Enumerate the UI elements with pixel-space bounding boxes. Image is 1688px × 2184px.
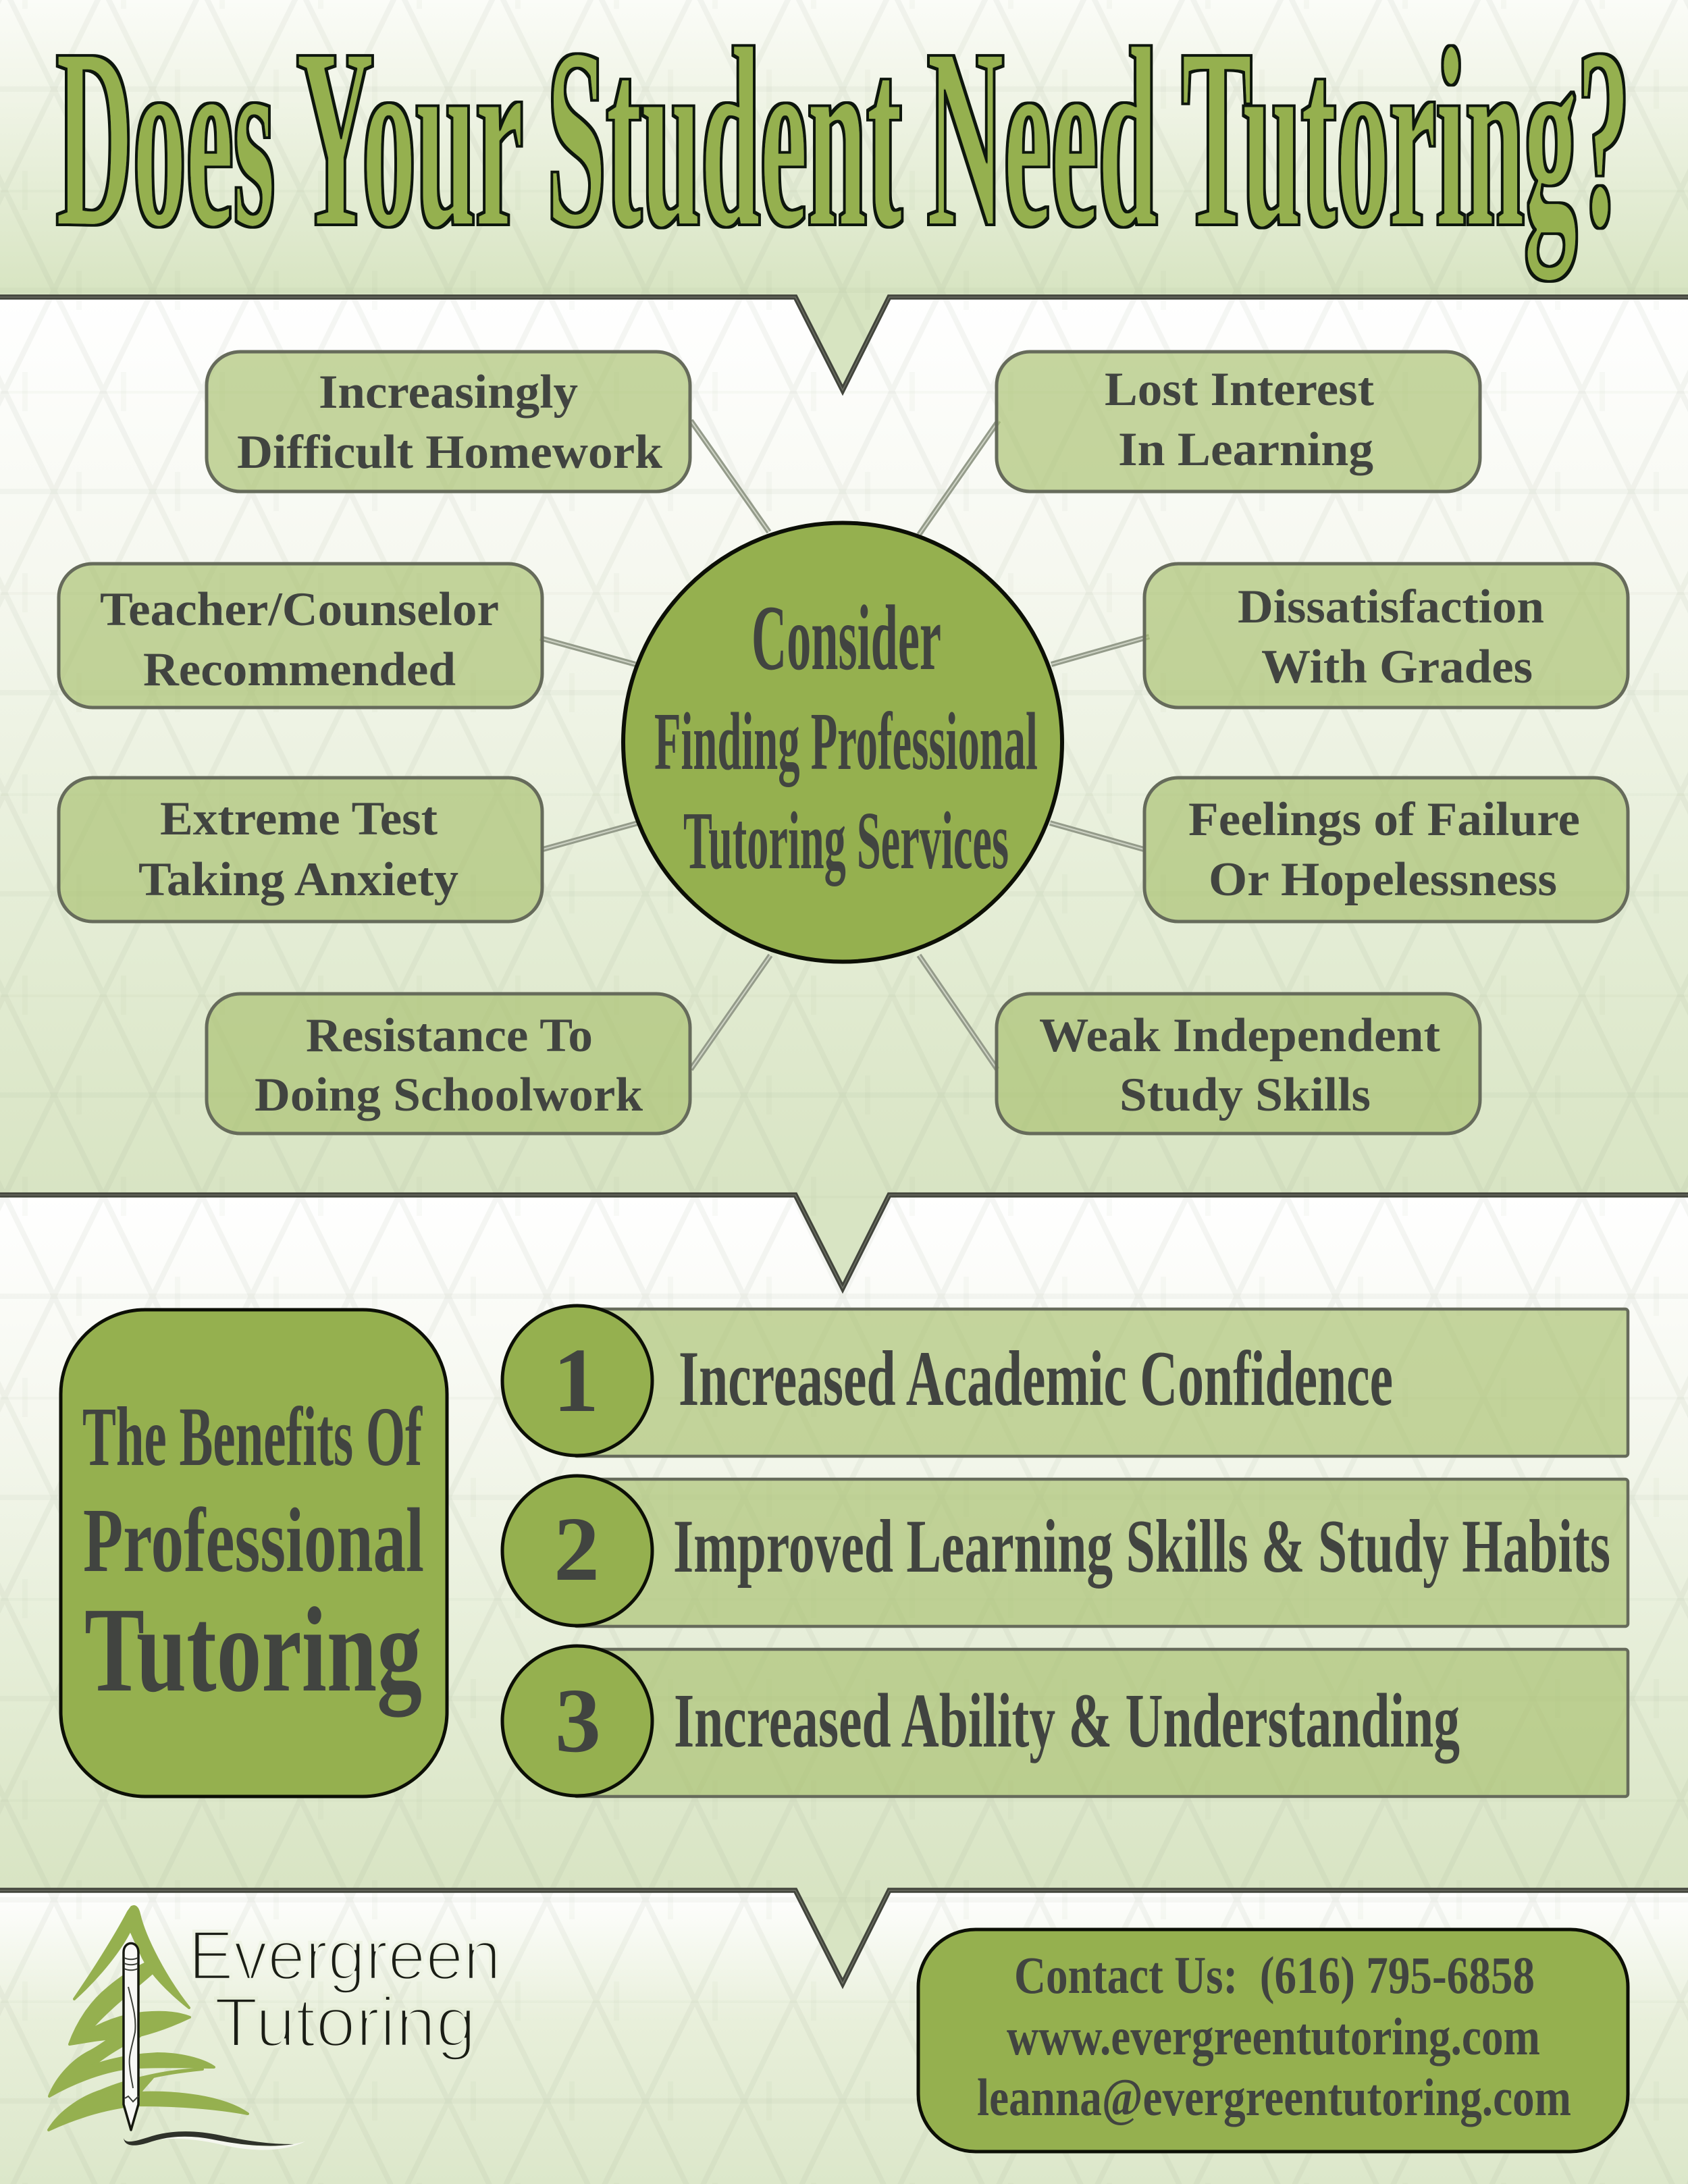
box: weak independent study skills: Study Skills	[1119, 1069, 1371, 1121]
box: increasingly difficult homework: Difficult Homework	[237, 426, 663, 479]
box: resistance to doing schoolwork	[207, 994, 690, 1134]
box: weak independent study skills: Weak Independent	[1039, 1009, 1440, 1062]
box: resistance to doing schoolwork: Doing Schoolwork	[255, 1069, 643, 1121]
benefit 1	[502, 1306, 1628, 1456]
panel: benefits heading	[61, 1310, 447, 1796]
panel: contact details: leanna@evergreentutoring.com	[977, 2068, 1571, 2127]
box: teacher/counselor recommended: Teacher/Counselor	[100, 583, 499, 636]
title: Your	[296, 0, 523, 280]
panel: contact details: Contact Us: (616) 795-6858	[1014, 1946, 1535, 2004]
icon: pencil	[124, 1943, 138, 2130]
box: increasingly difficult homework	[207, 352, 690, 491]
title: Does	[56, 0, 275, 280]
title	[56, 0, 1630, 284]
center circle: consider tutoring: Consider	[751, 586, 941, 689]
benefit 1: 1	[553, 1330, 599, 1431]
panel: contact details: www.evergreentutoring.com	[1007, 2007, 1540, 2066]
center circle: consider tutoring	[623, 523, 1062, 961]
box: lost interest in learning: Lost Interest	[1105, 363, 1374, 416]
box: teacher/counselor recommended	[59, 564, 542, 708]
center circle: consider tutoring: Tutoring Services	[683, 795, 1009, 886]
icon: ground swoosh	[124, 2131, 305, 2150]
box: feelings of failure or hopelessness	[1144, 778, 1628, 922]
logo wordmark: evergreen: Evergreen	[188, 1917, 501, 1995]
box: dissatisfaction with grades	[1144, 564, 1628, 708]
panel: benefits heading: Professional	[83, 1490, 424, 1591]
divider arrow: bottom	[0, 1890, 1688, 1983]
title: Student	[547, 0, 903, 280]
box: lost interest in learning	[997, 352, 1480, 491]
panel: warning sign boxes	[59, 352, 1628, 1134]
panel: benefits heading: Tutoring	[84, 1582, 422, 1717]
connector lines	[540, 421, 1149, 1069]
benefit 3: 3	[555, 1670, 601, 1772]
box: extreme test taking anxiety: Extreme Test	[160, 793, 438, 845]
box: extreme test taking anxiety: Taking Anxiety	[138, 853, 458, 906]
divider arrow: middle	[0, 1195, 1688, 1288]
box: teacher/counselor recommended: Recommended	[143, 643, 456, 696]
box: dissatisfaction with grades: Dissatisfaction	[1238, 581, 1544, 633]
icon: pencil details	[124, 1958, 138, 2102]
center circle: consider tutoring: Finding Professional	[654, 696, 1038, 787]
box: feelings of failure or hopelessness: Or Hopelessness	[1209, 853, 1557, 906]
logo wordmark: tutoring: Tutoring	[214, 1983, 476, 2062]
box: feelings of failure or hopelessness: Feelings of Failure	[1188, 793, 1580, 846]
benefit 3	[502, 1646, 1628, 1796]
box: increasingly difficult homework: Increasingly	[319, 366, 578, 419]
benefit 2	[502, 1476, 1628, 1626]
box: weak independent study skills	[997, 994, 1480, 1134]
box: resistance to doing schoolwork: Resistance To	[306, 1009, 593, 1062]
box: lost interest in learning: In Learning	[1118, 423, 1373, 476]
divider arrow: top	[0, 297, 1688, 390]
icon: tree brush strokes	[49, 1907, 248, 2130]
box: dissatisfaction with grades: With Grades	[1261, 641, 1533, 693]
benefit 2: 2	[554, 1499, 600, 1600]
logo: evergreen tutoring	[49, 1907, 501, 2150]
title: Need	[927, 0, 1157, 280]
panel: benefits heading: The Benefits Of	[82, 1391, 423, 1484]
box: extreme test taking anxiety	[59, 778, 542, 922]
panel: contact details	[918, 1929, 1628, 2152]
